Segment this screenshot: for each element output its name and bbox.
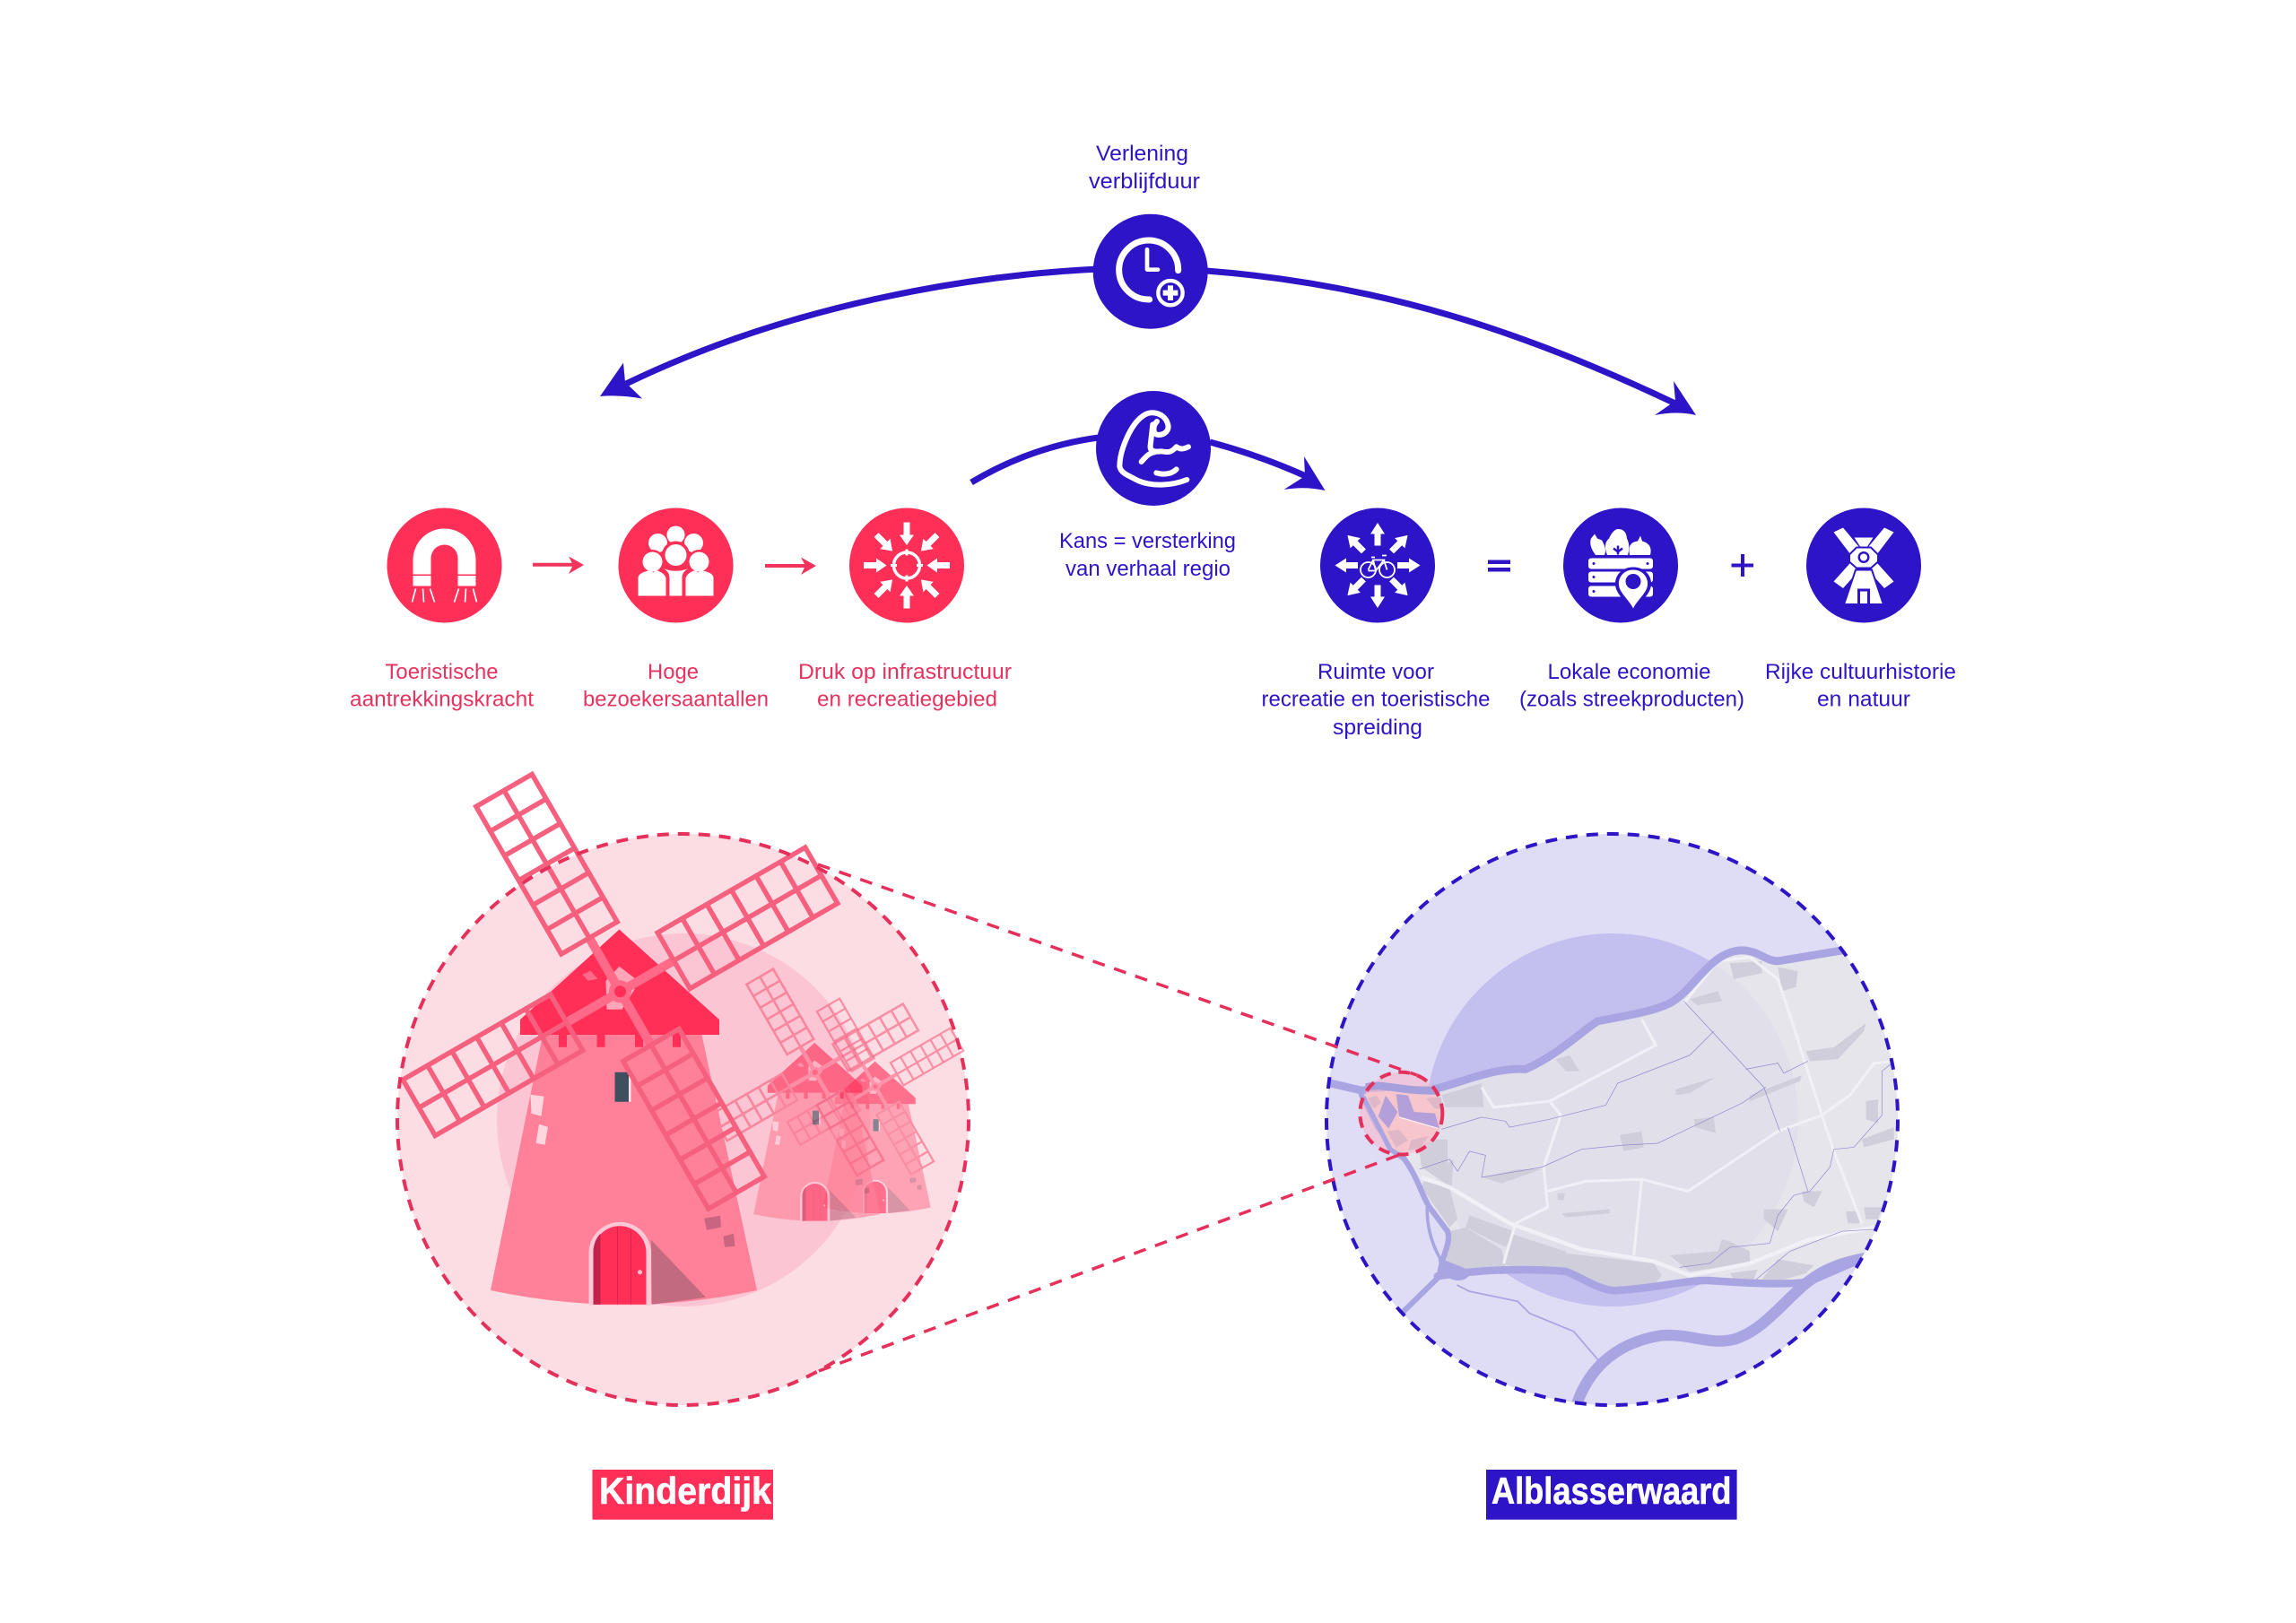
- text: Kans = versterking van verhaal regio: [1059, 529, 1236, 581]
- arrow: pink 1: [533, 556, 584, 574]
- text: Verlening verblijfduur: verblijfduur: [1089, 169, 1200, 194]
- thin waterways: [1420, 1002, 1892, 1281]
- arrow: short arc to recreation icon: [971, 438, 1326, 490]
- roads: [1422, 957, 1894, 1275]
- text: Hoge bezoekersaantallen: [583, 660, 769, 712]
- text: Ruimte voor recreatie en toeristische spreiding: recreatie en toeristische: [1261, 687, 1491, 712]
- text: Hoge bezoekersaantallen: bezoekersaantallen: [583, 687, 769, 712]
- text: Kans = versterking van verhaal regio: van verhaal regio: [1065, 557, 1231, 581]
- text: Ruimte voor recreatie en toeristische spreiding: spreiding: [1333, 716, 1422, 740]
- text: Verlening verblijfduur: [1089, 142, 1200, 194]
- panel: Kinderdijk windmills circle: [397, 774, 969, 1405]
- icon: inward pressure arrows: [849, 508, 964, 622]
- text: Lokale economie (zoals streekproducten): Lokale economie: [1548, 660, 1711, 684]
- text: Ruimte voor recreatie en toeristische spreiding: Ruimte voor: [1318, 660, 1434, 684]
- windmill: middle small: [712, 969, 918, 1221]
- text: Lokale economie (zoals streekproducten): [1519, 660, 1744, 712]
- windmill: far small: [787, 999, 963, 1213]
- arrow: pink 2: [765, 558, 816, 575]
- dashed zoom connector lines: [818, 864, 1417, 1371]
- text: Druk op infrastructuur en recreatiegebied: [798, 660, 1012, 712]
- text: Ruimte voor recreatie en toeristische spreiding: [1261, 660, 1491, 740]
- map of the region: [1321, 949, 1934, 1408]
- icon: flexed muscle: [1096, 391, 1211, 506]
- text: Toeristische aantrekkingskracht: [350, 660, 534, 712]
- towns: [1418, 961, 1894, 1289]
- icon: clock with plus: [1093, 214, 1208, 329]
- arrow: long arc to the right: [1206, 271, 1696, 415]
- text: Verlening verblijfduur: Verlening: [1096, 142, 1188, 166]
- text: Rijke cultuurhistorie en natuur: Rijke cultuurhistorie: [1765, 660, 1956, 684]
- windmill: large front: [403, 774, 838, 1306]
- icon: crate of local produce with map pin: [1563, 508, 1678, 622]
- label: Kinderdijk: Kinderdijk: [599, 1470, 772, 1512]
- text: Kans = versterking van verhaal regio: Kans = versterking: [1059, 529, 1236, 553]
- text: Druk op infrastructuur en recreatiegebied: en recreatiegebied: [817, 687, 997, 712]
- label: Alblasserwaard: Alblasserwaard: [1492, 1470, 1731, 1512]
- panel: Alblasserwaard map circle: [1321, 834, 1934, 1408]
- text: Toeristische aantrekkingskracht: aantrekkingskracht: [350, 687, 534, 712]
- arrow: long arc to the left: [600, 269, 1099, 398]
- icon: white windmill: [1806, 508, 1921, 622]
- text: Hoge bezoekersaantallen: Hoge: [648, 660, 699, 684]
- text: Rijke cultuurhistorie en natuur: en natuur: [1817, 687, 1910, 712]
- text: Rijke cultuurhistorie en natuur: [1765, 660, 1956, 712]
- text: Lokale economie (zoals streekproducten): (zoals streekproducten): [1519, 687, 1744, 712]
- text: Toeristische aantrekkingskracht: Toeristische: [386, 660, 499, 684]
- highlighted Kinderdijk area on map: [1360, 1072, 1442, 1159]
- icon: bicycle with outward arrows: [1320, 508, 1435, 622]
- icon: magnet: [387, 508, 502, 622]
- text: Druk op infrastructuur en recreatiegebied: Druk op infrastructuur: [798, 660, 1012, 684]
- rivers: [1321, 949, 1870, 1408]
- icon: crowd of people: [619, 508, 734, 622]
- icon: equals sign: [1488, 560, 1510, 572]
- icon: plus sign: [1731, 554, 1753, 577]
